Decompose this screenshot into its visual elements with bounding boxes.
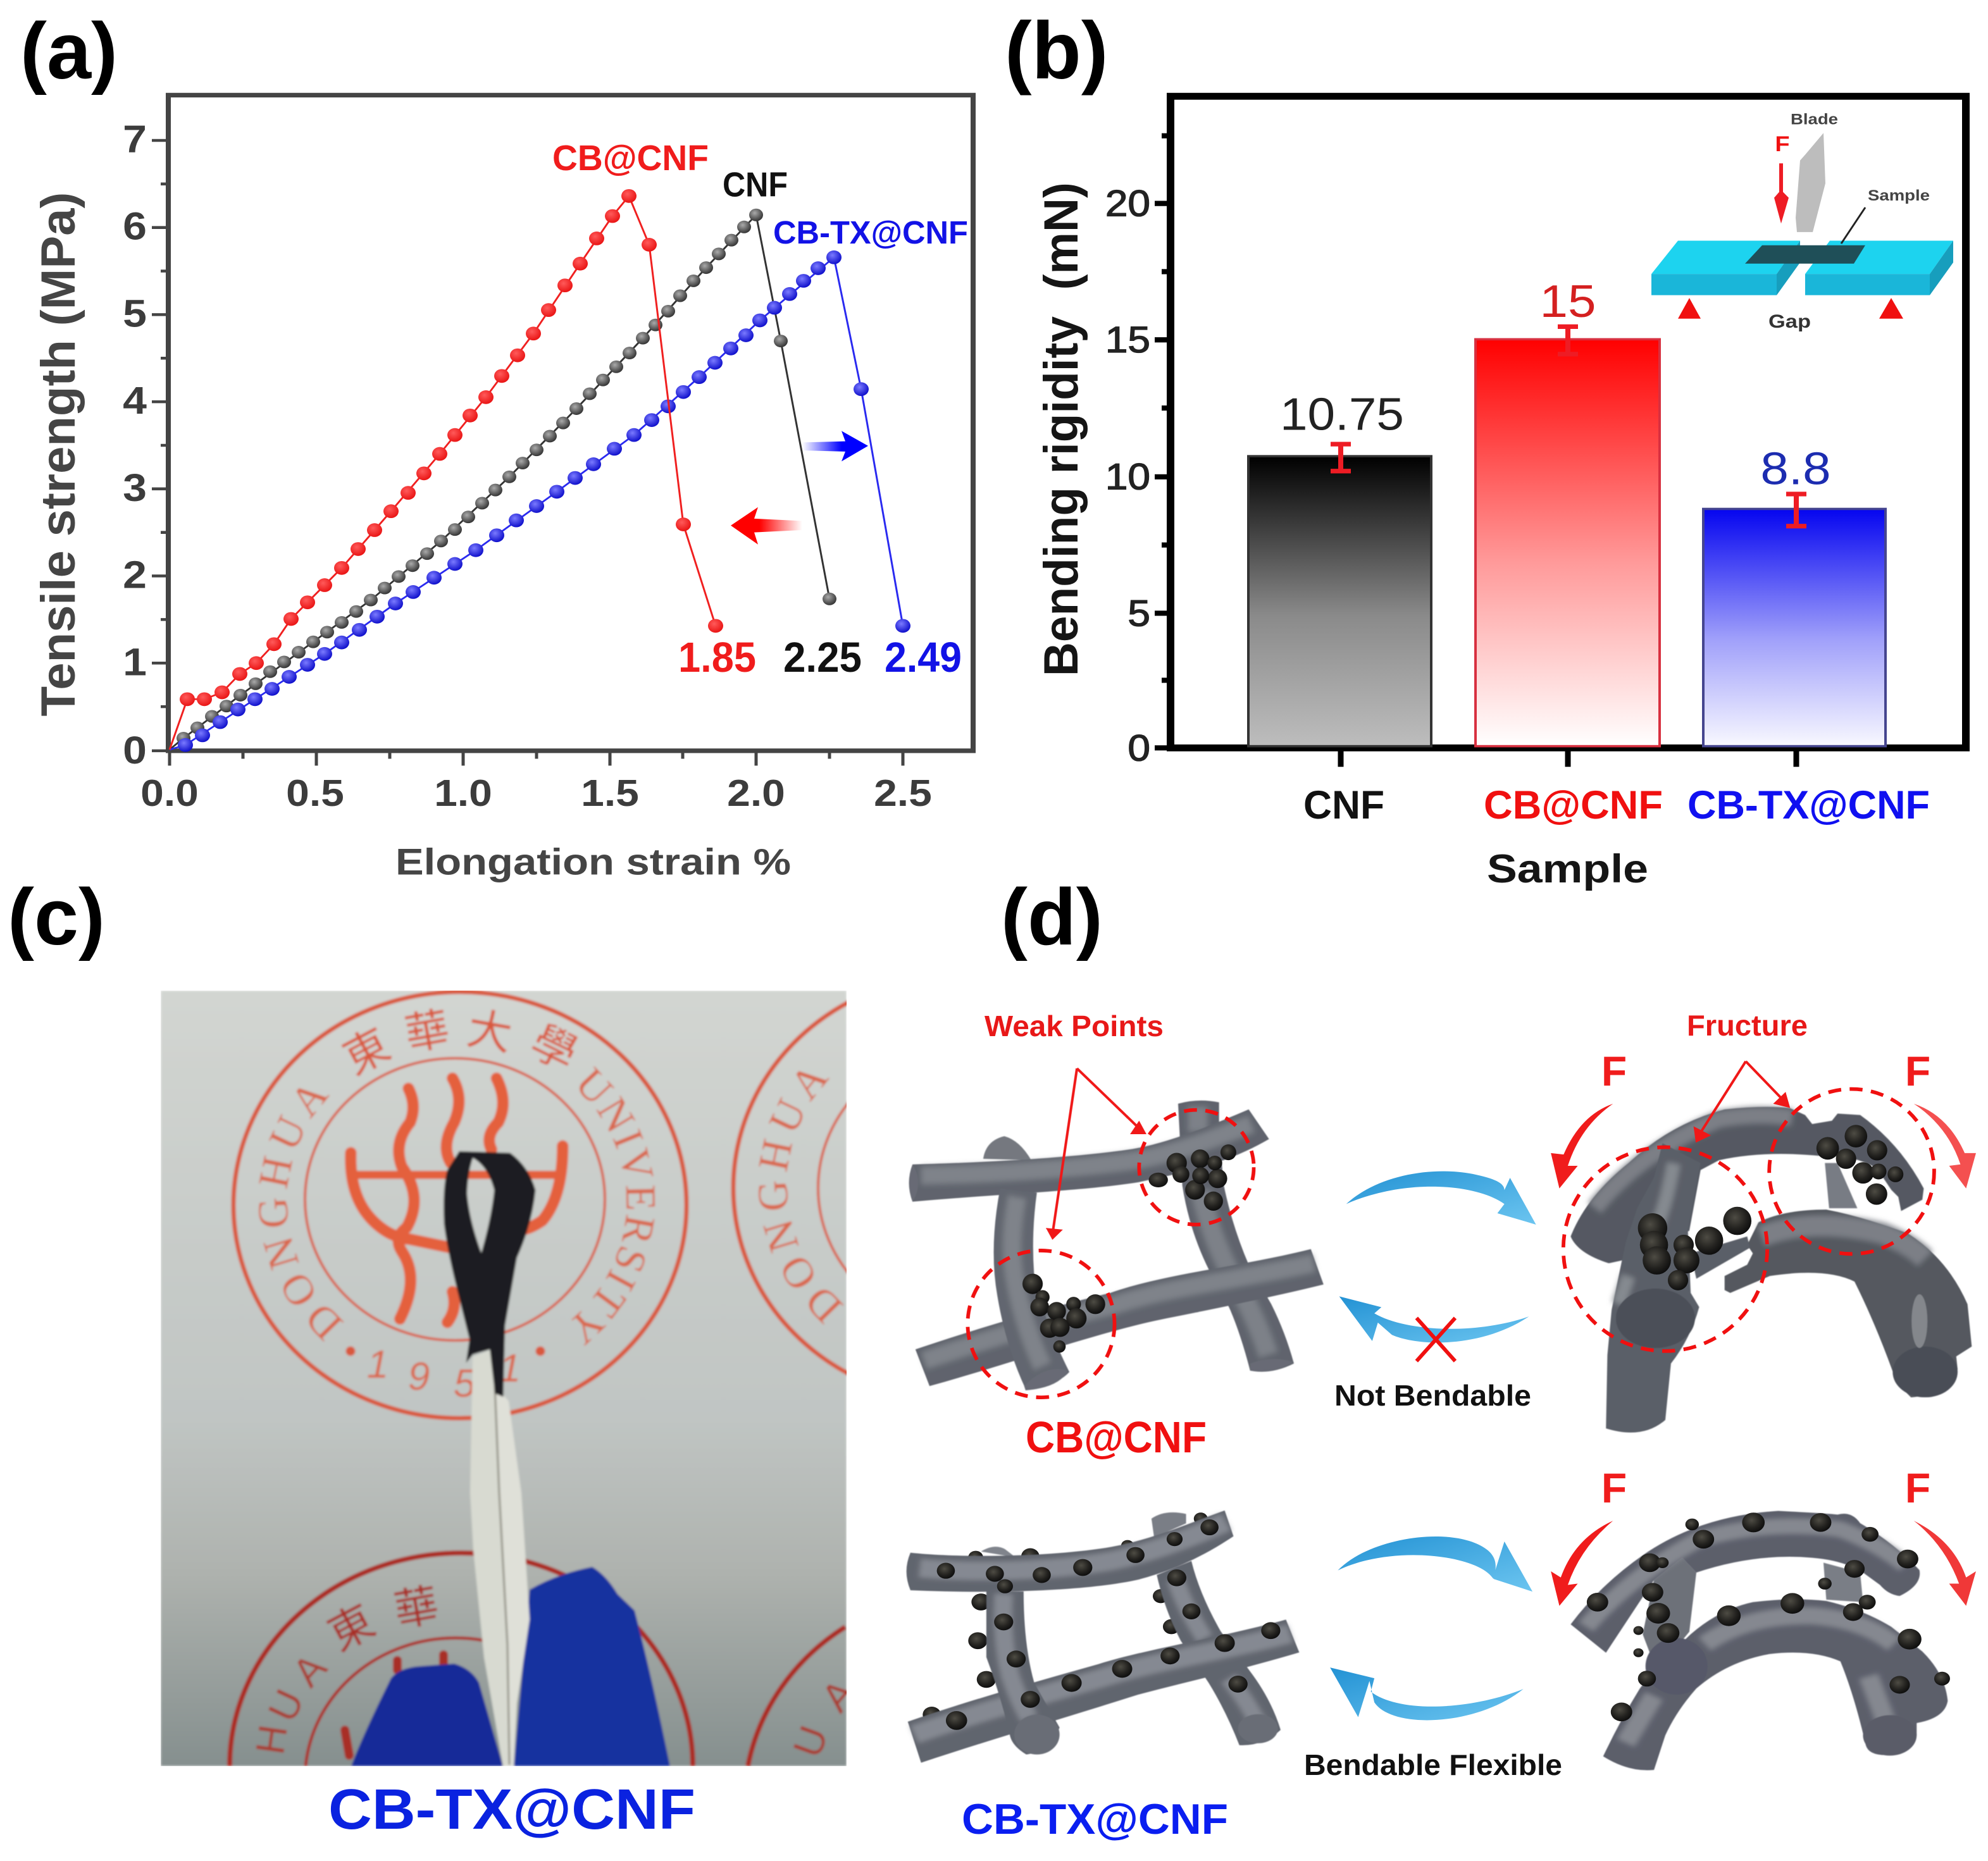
- y axis tick labels: 0: [123, 728, 147, 772]
- left support block: [1651, 241, 1800, 295]
- seal text Chinese: 學: [523, 1017, 585, 1080]
- fibre: left vertical: [994, 1189, 1069, 1389]
- force arrow left: [1551, 1521, 1613, 1606]
- fibre: bottom horizontal: [916, 1249, 1324, 1386]
- seal: bottom left: [230, 1553, 693, 1766]
- dispersed particles: [937, 1519, 1281, 1730]
- y axis tick labels: 5: [123, 291, 147, 335]
- value 2.49: 2.49: [885, 633, 962, 681]
- label (d): (d): [1001, 872, 1103, 961]
- force label F bottom left: F: [1601, 1464, 1627, 1511]
- light streak: [1911, 1294, 1927, 1348]
- bottom seal Chinese: [320, 1580, 442, 1660]
- seal text UNIVERSITY: UNIVERSITY: [571, 1065, 656, 1346]
- strip centre line: [495, 1385, 509, 1765]
- upper arch: [1570, 1511, 1920, 1653]
- vertical piece: [1643, 1558, 1696, 1671]
- lower highlight: [1625, 1616, 1894, 1743]
- bottom seal text: A: [283, 1645, 335, 1695]
- seal year: 1: [499, 1347, 521, 1390]
- back vertical: [1823, 1562, 1863, 1602]
- heading Fructure: Fructure: [1687, 1009, 1808, 1042]
- x axis tick labels: 1.0: [434, 772, 492, 814]
- series: CB@CNF (red): [170, 189, 723, 750]
- force arrow left: [1551, 1104, 1613, 1189]
- fibre: top: [907, 1511, 1233, 1592]
- series: CNF (black): [170, 209, 836, 750]
- fibre: bottom: [908, 1619, 1299, 1763]
- bottom inner ring: [306, 1638, 606, 1766]
- back vertical: [1825, 1163, 1858, 1208]
- bottom right ring: [748, 1627, 845, 1766]
- series label CB@CNF: CB@CNF: [552, 138, 709, 178]
- x axis tick labels: 0.5: [286, 772, 344, 814]
- right vertical highlight: [1198, 1106, 1269, 1355]
- broken end face: [1616, 1289, 1695, 1348]
- sample strip: [1745, 245, 1865, 264]
- value 2.25: 2.25: [783, 633, 862, 681]
- seal text DONGHUA: DONGHUA: [258, 1087, 344, 1342]
- y axis tick labels: 7: [123, 117, 147, 161]
- black coated loop: [444, 1151, 535, 1397]
- seal text Chinese: 東: [335, 1020, 398, 1084]
- arrows between bottom row states: [1330, 1536, 1532, 1720]
- seal: bottom right: [748, 1627, 864, 1766]
- bottom highlight: [924, 1263, 1314, 1361]
- x axis title: Sample: [1487, 847, 1648, 891]
- right vertical highlight: [1176, 1580, 1258, 1723]
- fibres: [1570, 1107, 1972, 1433]
- left vertical highlight: [1003, 1594, 1029, 1718]
- fibres: [1570, 1511, 1948, 1771]
- caption CB-TX@CNF photo: CB-TX@CNF: [328, 1778, 695, 1841]
- panel b: bending rigidity chart: [1034, 96, 1966, 891]
- seal: main: [230, 991, 690, 1422]
- dashed circles: fracture sites: [1563, 1089, 1934, 1351]
- y axis tick labels: 6: [123, 204, 147, 248]
- bottom seal text: U: [259, 1683, 313, 1728]
- seal year: 5: [454, 1362, 476, 1406]
- category label CB@CNF: CB@CNF: [1484, 783, 1663, 827]
- y axis tick labels: 4: [123, 378, 147, 422]
- fibres: [909, 1101, 1324, 1390]
- end cap: [1863, 1715, 1917, 1755]
- support triangles: [1678, 298, 1903, 319]
- bridge piece: [1691, 1237, 1750, 1279]
- fibre: left vertical stub: [983, 1136, 1031, 1160]
- y axis tick labels: 20: [1105, 183, 1150, 224]
- arrows: fracture: [1694, 1061, 1790, 1142]
- series: CB-TX@CNF (blue): [170, 250, 910, 752]
- category label CNF: CNF: [1303, 783, 1384, 827]
- label (a): (a): [20, 6, 118, 96]
- blade label: Blade: [1791, 111, 1838, 128]
- chart frame: [1171, 96, 1966, 748]
- x axis tick labels: 1.5: [581, 772, 639, 814]
- upper highlight: [1586, 1526, 1905, 1627]
- chart frame: [168, 95, 973, 751]
- lower arch with legs: [1603, 1599, 1948, 1771]
- bottom right seal text: A: [812, 1670, 864, 1720]
- bar CB-TX@CNF: [1703, 509, 1885, 746]
- blade: [1796, 133, 1825, 232]
- particle clusters (aggregated carbon black): [1022, 1144, 1236, 1353]
- y axis tick labels: 10: [1105, 456, 1150, 497]
- particles behind fibres: [923, 1512, 1219, 1731]
- seal year: 9: [408, 1355, 430, 1399]
- blue arrow: return: [1330, 1667, 1524, 1720]
- bar CNF: [1248, 456, 1431, 746]
- x axis tick labels: 2.0: [727, 772, 785, 814]
- blue arrow: bending forward: [1338, 1536, 1532, 1592]
- y axis tick labels: [1105, 183, 1150, 769]
- arrow: blue right: [802, 431, 868, 461]
- inset: blade test schematic: [1651, 111, 1953, 332]
- x axis title: Elongation strain %: [395, 841, 791, 882]
- label (c): (c): [8, 872, 105, 961]
- left vertical highlight: [1012, 1197, 1043, 1366]
- bar CB@CNF: [1475, 339, 1660, 746]
- fibre: left vertical: [986, 1592, 1060, 1755]
- upper arch highlight: [1594, 1115, 1792, 1208]
- seal emblem: [351, 1079, 562, 1322]
- y axis tick labels: 5: [1128, 593, 1150, 634]
- force label F top right: F: [1905, 1048, 1930, 1094]
- seal text Chinese: 大: [464, 1003, 516, 1060]
- blue arrow: bending forward: [1346, 1172, 1536, 1225]
- left vertical: [1606, 1143, 1701, 1433]
- bottom right seal text: [784, 1670, 864, 1763]
- fibre end caps: [909, 1165, 1294, 1390]
- dashed circles: weak points: [967, 1110, 1254, 1397]
- fibre: right vertical: [1157, 1561, 1281, 1745]
- fibre: right vertical: [1178, 1101, 1294, 1371]
- left vertical highlight: [1618, 1163, 1674, 1304]
- top highlight: [921, 1124, 1252, 1176]
- value 10.75: 10.75: [1280, 389, 1404, 440]
- arrows: weak points: [1046, 1068, 1146, 1240]
- end cap right: [1238, 1714, 1278, 1743]
- fractured fibre network CB@CNF: [1551, 1061, 1976, 1433]
- lower arch: [1725, 1209, 1972, 1397]
- seal rings: [233, 992, 686, 1418]
- heading Weak Points: Weak Points: [985, 1010, 1164, 1042]
- panel c: photograph of folded sample: [161, 991, 847, 1766]
- bottom seal text: H: [247, 1722, 296, 1757]
- y axis tick labels: 0: [1128, 727, 1150, 769]
- y axis tick labels: 2: [123, 553, 147, 597]
- panel a: tensile strength chart: [32, 95, 973, 882]
- label Bendable Flexible: Bendable Flexible: [1304, 1748, 1562, 1781]
- label CB-TX@CNF: CB-TX@CNF: [962, 1795, 1228, 1843]
- aggregated particles on fractured fibres: [1638, 1125, 1903, 1290]
- right rings: [733, 975, 1186, 1401]
- bottom rings: [230, 1553, 693, 1766]
- label (b): (b): [1005, 6, 1108, 96]
- arrows between top row states: [1339, 1172, 1536, 1361]
- axis ticks: [152, 140, 903, 765]
- value 15: 15: [1540, 276, 1596, 327]
- bottom highlight: [914, 1634, 1290, 1734]
- y axis tick labels: 1: [123, 640, 147, 684]
- y axis title: Bending rigidity (mN): [1034, 182, 1088, 676]
- right support block: [1805, 241, 1953, 295]
- seal text Chinese: [340, 1007, 578, 1077]
- error bars: [1331, 326, 1806, 526]
- blue arrow: return: [1339, 1296, 1529, 1342]
- series label CB-TX@CNF: CB-TX@CNF: [773, 215, 968, 250]
- lower arch highlight: [1761, 1226, 1925, 1259]
- label Not Bendable: Not Bendable: [1334, 1379, 1531, 1412]
- bottom seal Chinese: 東: [320, 1596, 383, 1660]
- white strip left: [470, 1349, 509, 1766]
- end caps: [1014, 1715, 1060, 1755]
- category label CB-TX@CNF: CB-TX@CNF: [1687, 783, 1930, 827]
- force arrow right: [1914, 1521, 1976, 1606]
- red cross: not reversible: [1417, 1318, 1455, 1361]
- seal: right: [730, 999, 847, 1376]
- force label: F: [1775, 132, 1790, 156]
- junction cap: [1646, 1638, 1708, 1695]
- series label CNF: CNF: [723, 166, 788, 204]
- y axis title: Tensile strength (MPa): [32, 192, 85, 717]
- white strip right: [495, 1385, 530, 1766]
- x axis tick labels: 0.0: [140, 772, 199, 814]
- fibre: top horizontal: [909, 1110, 1269, 1202]
- value 8.8: 8.8: [1760, 443, 1831, 495]
- value 1.85: 1.85: [678, 633, 756, 681]
- x axis tick labels: [140, 772, 932, 814]
- label CB@CNF: CB@CNF: [1026, 1413, 1207, 1462]
- y axis tick labels: [123, 117, 147, 772]
- upper arch: [1570, 1107, 1923, 1263]
- x axis tick labels: 2.5: [874, 772, 932, 814]
- end face right: [1892, 1347, 1958, 1397]
- seal text Chinese: 華: [401, 1003, 453, 1060]
- bottom emblem fragments: [345, 1655, 444, 1755]
- sample label: Sample: [1868, 187, 1930, 204]
- left glove finger: [351, 1664, 503, 1766]
- seal year: [367, 1349, 519, 1398]
- right glove finger: [514, 1567, 670, 1766]
- right stub: [1152, 1512, 1186, 1537]
- seal year: 1: [367, 1343, 388, 1387]
- bottom right seal text: U: [784, 1720, 837, 1763]
- fibre network CB@CNF before bending: [909, 1068, 1324, 1397]
- bottom seal Chinese: 華: [390, 1580, 442, 1636]
- sample leader line: [1841, 207, 1865, 244]
- photo background: [161, 991, 847, 1766]
- bottom seal text: [247, 1645, 335, 1757]
- fibre network CB-TX@CNF before bending: [907, 1511, 1299, 1763]
- top highlight: [920, 1522, 1226, 1571]
- gap label: Gap: [1768, 311, 1811, 332]
- fibres: [907, 1511, 1299, 1763]
- bent fibre network CB-TX@CNF: [1551, 1511, 1976, 1771]
- arrow: red left: [731, 507, 802, 545]
- force label F top left: F: [1601, 1048, 1627, 1094]
- axis ticks: [1155, 136, 1796, 767]
- force arrow right: [1914, 1104, 1976, 1189]
- force arrow: [1774, 163, 1789, 223]
- left stub: [981, 1547, 1016, 1557]
- right seal text: DONGHUA: [757, 1070, 844, 1325]
- dispersed particles on bent fibres: [1587, 1512, 1950, 1721]
- force label F bottom right: F: [1905, 1464, 1930, 1511]
- y axis tick labels: 3: [123, 466, 147, 509]
- y axis tick labels: 15: [1105, 319, 1150, 361]
- seal dots: [351, 1346, 540, 1356]
